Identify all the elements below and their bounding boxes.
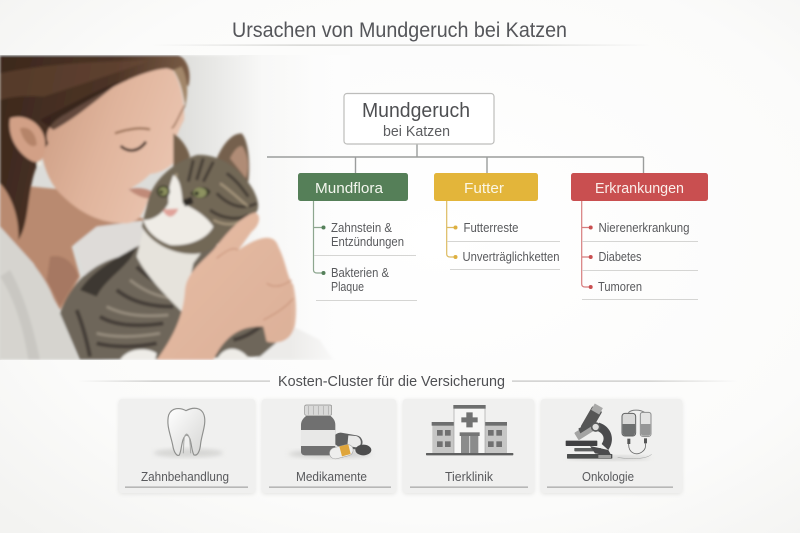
item: Futterreste: Futterreste <box>464 221 519 235</box>
root box <box>344 94 494 144</box>
card: Onkologie: Onkologie <box>582 470 634 484</box>
card: Tierklinik <box>403 399 534 494</box>
card: Onkologie <box>541 399 682 494</box>
heading: Futter: Futter <box>464 180 504 197</box>
card: Tierklinik: Tierklinik <box>445 470 494 484</box>
item: Nierenerkrankung: Nierenerkrankung <box>598 221 690 235</box>
tree connector lines <box>267 143 644 174</box>
root box: bei Katzen <box>383 123 450 140</box>
card: Zahnbehandlung <box>119 399 255 494</box>
panel: Mundflora <box>298 173 417 301</box>
icon: tooth <box>153 408 223 457</box>
icon: microscope and infusion bags <box>566 403 652 460</box>
item: Zahnstein: Entzündungen <box>331 235 404 249</box>
item: Bakterien: Bakterien & <box>331 266 390 280</box>
root box: Mundgeruch <box>362 100 470 122</box>
item: Zahnstein: Zahnstein & <box>331 221 393 235</box>
photo: woman cuddling a tabby cat <box>0 55 324 360</box>
item: Unverträglichketten: Unverträglichketten <box>462 250 560 264</box>
item: Zahnstein <box>331 221 404 249</box>
item: Bakterien <box>331 266 390 294</box>
panel: Erkrankungen <box>571 173 708 300</box>
icon: hospital building <box>426 405 513 455</box>
card: Zahnbehandlung: Zahnbehandlung <box>141 470 229 484</box>
card: Medikamente: Medikamente <box>296 470 367 484</box>
section heading: Kosten-Cluster: Kosten-Cluster für die Versicherung <box>278 374 505 390</box>
card: Medikamente <box>262 399 396 494</box>
item: Bakterien: Plaque <box>331 280 364 294</box>
heading: Erkrankungen: Erkrankungen <box>595 180 684 197</box>
item: Tumoren: Tumoren <box>598 280 642 294</box>
panel: Futter <box>434 173 560 270</box>
icon: medicine bottle and pills <box>288 405 372 460</box>
heading: Mundflora: Mundflora <box>315 180 384 197</box>
title: Ursachen von Mundgeruch bei Katzen <box>232 19 567 42</box>
item: Diabetes: Diabetes <box>598 250 642 264</box>
